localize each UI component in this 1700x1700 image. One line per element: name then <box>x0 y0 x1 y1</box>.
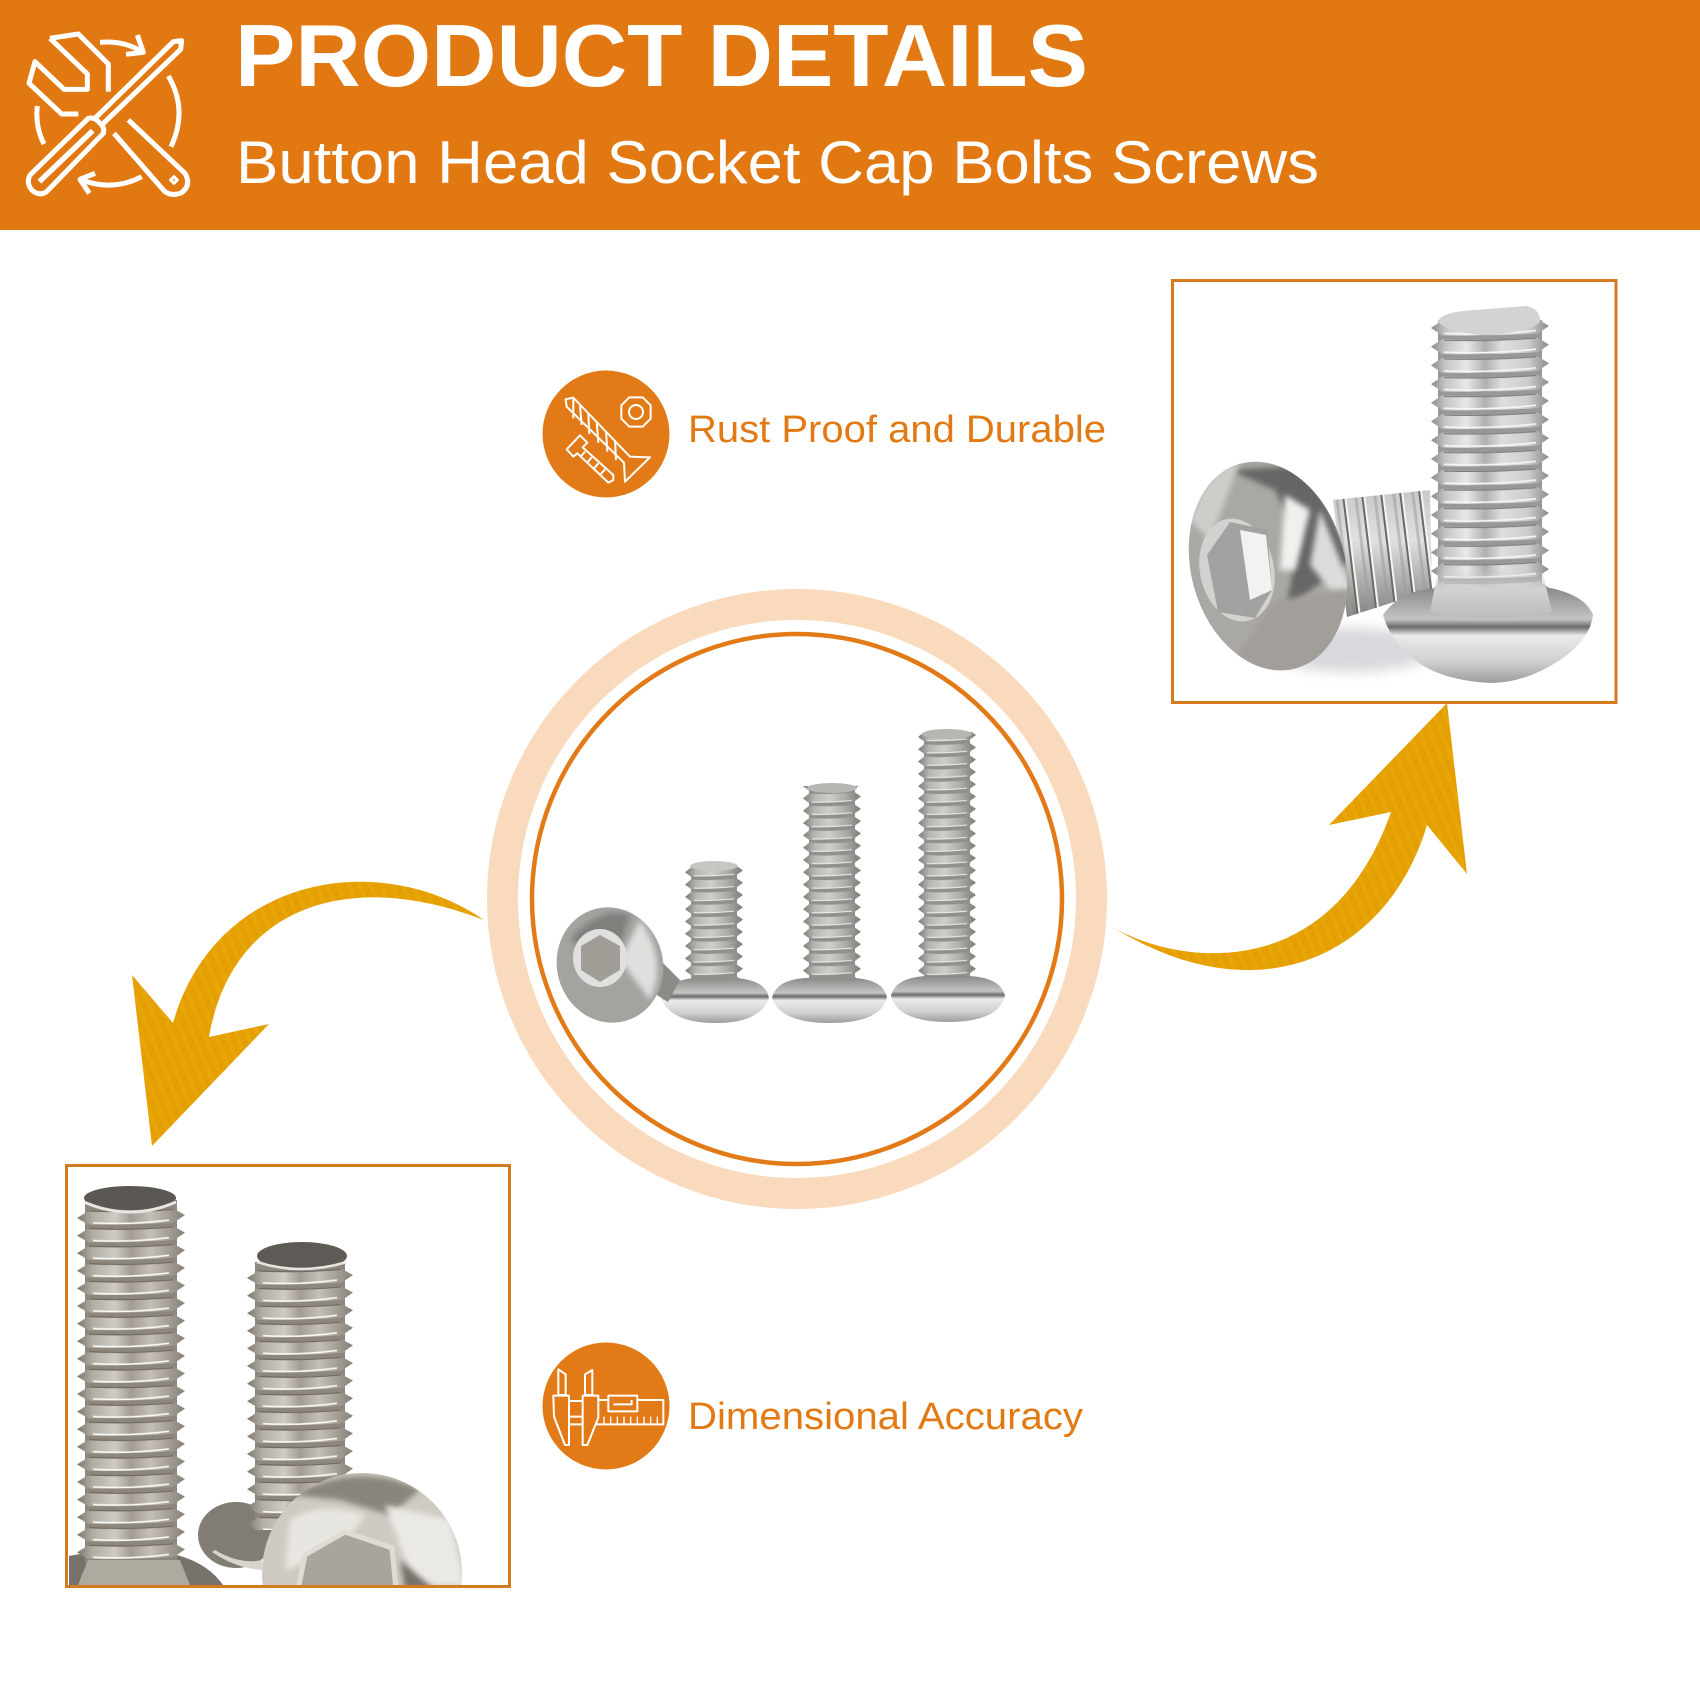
feature: dimensional accuracy <box>542 1342 1083 1470</box>
arrow: to bottom left photo <box>132 882 484 1146</box>
peach ring <box>502 604 1092 1194</box>
feature: rust proof and durable <box>542 370 1106 498</box>
bolt: long <box>69 1186 223 1585</box>
title: PRODUCT DETAILS <box>235 6 1088 105</box>
bolt: head-on <box>544 895 680 1035</box>
label: Rust Proof and Durable <box>688 409 1106 451</box>
arrow: to top right photo <box>1114 703 1467 970</box>
bolt: long <box>891 729 1005 1022</box>
icon: tools <box>28 34 188 194</box>
bolt: medium <box>772 783 887 1023</box>
bolt: upright <box>1383 306 1593 683</box>
bolt: medium <box>198 1242 353 1570</box>
label: Dimensional Accuracy <box>688 1396 1083 1438</box>
orange ring <box>532 634 1062 1164</box>
header banner <box>0 0 1700 230</box>
subtitle: Button Head Socket Cap Bolts Screws <box>236 129 1319 196</box>
shadow <box>1265 628 1435 672</box>
bolt: short <box>662 861 769 1023</box>
icon: caliper <box>542 1342 670 1470</box>
panel: top right photo <box>1166 280 1616 702</box>
central circle panel <box>502 604 1092 1194</box>
bolt: lying <box>1188 462 1432 670</box>
four bolts photo <box>544 729 1005 1035</box>
icon: screws and nut <box>542 370 670 498</box>
panel: bottom left photo <box>65 1164 511 1588</box>
bolt: dome head <box>262 1473 462 1585</box>
